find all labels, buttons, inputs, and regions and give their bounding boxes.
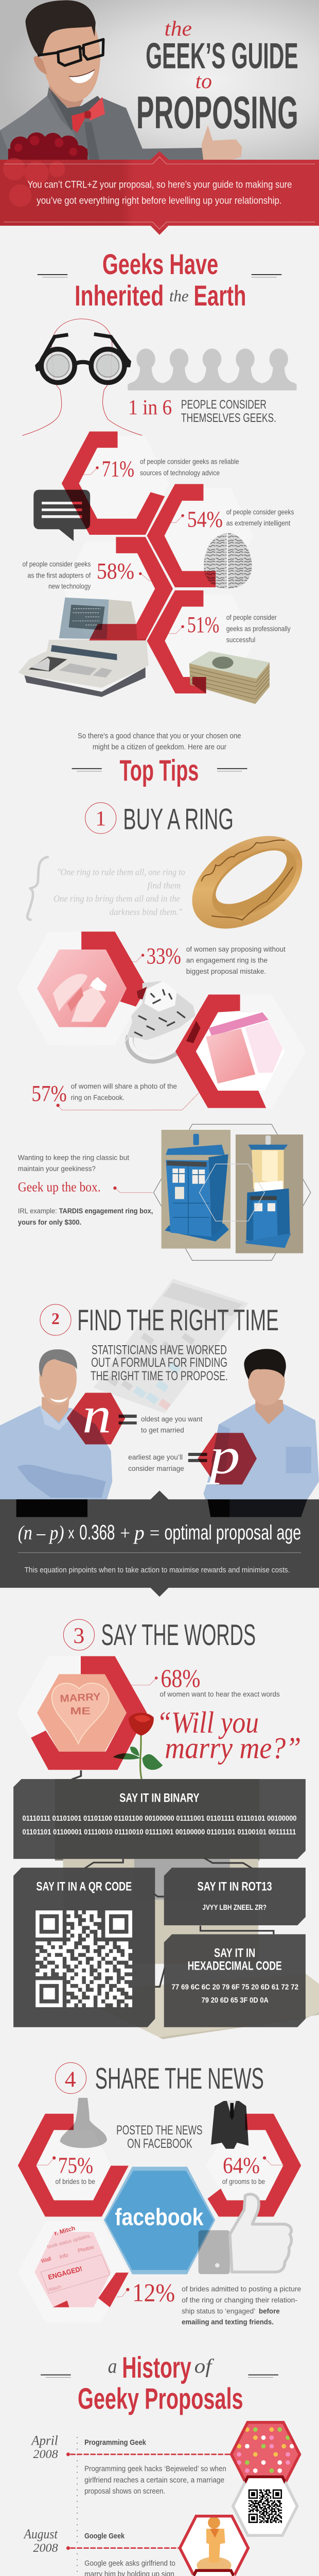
QR code hexagon xyxy=(233,2477,297,2535)
section: tip 4 share the news xyxy=(18,2062,301,2327)
text: geek up the box: TARDIS engagement ring box, xyxy=(59,1207,153,1215)
hexagon: engaged facebook status xyxy=(18,2221,129,2323)
panel: say it in hexadecimal code xyxy=(164,1934,306,2027)
hexagon chain red frames xyxy=(62,431,216,693)
panel: say it in hexadecimal code: SAY IT IN xyxy=(214,1946,255,1960)
icon: speech bubble xyxy=(33,490,90,541)
stat 58%: of people consider geeks xyxy=(22,561,91,569)
heading: a History of Geeky Proposals: Geeky Proposals xyxy=(78,2382,243,2415)
text: statisticians: THE RIGHT TIME TO PROPOSE. xyxy=(91,1369,228,1383)
section: 1 in 6 geeks and reputation stats xyxy=(19,319,297,704)
quote: will you marry me: “Will you xyxy=(156,1705,259,1739)
intro text: might be a citizen of geekdom. Here are our xyxy=(93,743,226,752)
hexagon: brides frame xyxy=(18,2114,129,2216)
dark formula band: x xyxy=(68,1523,74,1542)
hero backdrop xyxy=(0,0,319,161)
head outline xyxy=(22,319,143,435)
panel: say it in binary: SAY IT IN BINARY xyxy=(119,1791,200,1805)
dark formula band: 0.368 xyxy=(79,1520,115,1544)
equals sign and p definition: earliest age you’ll xyxy=(128,1453,183,1462)
icon: thumbs up xyxy=(199,2194,291,2274)
icon: red rose xyxy=(113,1713,163,1779)
stat 33%: 33% xyxy=(147,943,181,969)
stat: 1 in 6 people: PEOPLE CONSIDER xyxy=(181,398,267,412)
stat 71%: 71% xyxy=(102,456,134,481)
timeline: April 2008 programming geek: April xyxy=(30,2432,58,2448)
tip 1 heading: Buy a ring: BUY A RING xyxy=(123,803,234,836)
stat 33% xyxy=(120,943,286,976)
stat 12%: of the ring or changing their relation- xyxy=(182,2296,297,2304)
quote: will you marry me: marry me?” xyxy=(165,1731,301,1765)
timeline dotted spine xyxy=(77,2437,78,2576)
hexagon: 33% of women xyxy=(16,931,147,1045)
hexagon: engaged facebook status: r. Mitch xyxy=(54,2224,76,2237)
timeline: August 2008 google geek: August xyxy=(23,2526,58,2541)
hexagon: engaged facebook status: Info xyxy=(59,2252,69,2260)
equals sign and n definition xyxy=(119,1415,202,1435)
panel: say it in hexadecimal code: HEXADECIMAL CODE xyxy=(188,1960,282,1973)
panel: say it in a QR code xyxy=(13,1868,155,2027)
equals sign and p definition xyxy=(128,1453,207,1473)
panel: say it in a QR code: SAY IT IN A QR CODE xyxy=(36,1880,132,1893)
stat 68% xyxy=(130,1664,280,1699)
stat 68%: 68% xyxy=(161,1664,200,1692)
icon: brain xyxy=(204,533,252,588)
stat 51% xyxy=(164,612,291,645)
stat 64% xyxy=(222,2153,283,2185)
icon: vintage computer xyxy=(19,598,149,697)
stat 75% xyxy=(36,2153,95,2185)
stat 51%: of people consider xyxy=(226,614,277,622)
stat 12%: before xyxy=(259,2307,280,2315)
dark formula band: (n – p) xyxy=(18,1521,64,1544)
stat 51%: successful xyxy=(226,636,255,645)
connectors between panels xyxy=(84,1858,274,1987)
red intro banner: you’ve got everything right before levelling up your relationship. xyxy=(37,195,282,206)
text: posted the news on facebook xyxy=(116,2124,202,2151)
intro text xyxy=(78,732,241,752)
quote: one ring: find them xyxy=(148,880,181,890)
heading: Geeks Have Inherited the Earth: the xyxy=(169,287,189,305)
section: tip 2 find the right time xyxy=(0,1279,319,1597)
heading: a History of Geeky Proposals: History xyxy=(122,2351,191,2384)
heading: Geeks Have Inherited the Earth xyxy=(38,248,281,312)
dark formula band: + xyxy=(120,1523,130,1544)
faded computer behind panels xyxy=(55,1779,319,2039)
stat 54%: as extremely intelligent xyxy=(226,519,290,528)
section: tip 3 say the words xyxy=(13,1619,319,2039)
hexagon: engaged facebook status: Photos xyxy=(77,2244,95,2254)
stat 71%: of people consider geeks as reliable xyxy=(140,458,239,466)
stat 64%: 64% xyxy=(223,2153,260,2178)
hexagon: grooms frame xyxy=(206,2114,301,2216)
connector xyxy=(72,1770,81,1780)
hexagon: engaged facebook status: book status updates, xyxy=(47,2233,92,2250)
stat 33%: of women say proposing without xyxy=(186,945,286,954)
image: bejeweled game xyxy=(231,2422,300,2487)
icon: diamond ring xyxy=(124,981,196,1060)
stat 54%: 54% xyxy=(187,507,223,532)
timeline: April 2008 programming geek: Programming Geek xyxy=(84,2438,146,2447)
title: the Geek's Guide to Proposing xyxy=(136,16,298,138)
hexagon: engaged facebook status: Attach: xyxy=(48,2284,63,2292)
timeline: April 2008 programming geek: Programming geek hacks ‘Bejeweled’ so when xyxy=(84,2465,226,2473)
icon: facebook hexagon with logo xyxy=(104,2167,215,2274)
stat 71% xyxy=(79,456,239,481)
TARDIS ring box photos xyxy=(154,1124,311,1260)
dark formula band: This equation pinpoints when to take action to maximise rewards and minimise costs. xyxy=(24,1566,290,1574)
photo: older man with crossed arms xyxy=(0,1349,112,1517)
dark formula band: p xyxy=(133,1521,145,1544)
text: posted the news on facebook: POSTED THE NEWS xyxy=(116,2124,202,2138)
heading: Geeks Have Inherited the Earth: Geeks Have xyxy=(102,248,218,280)
text: geek up the box: Wanting to keep the ring classic but xyxy=(18,1154,129,1162)
stat 57% xyxy=(31,1081,199,1110)
equals sign and n definition: oldest age you want xyxy=(141,1415,202,1423)
equals sign and n definition: to get married xyxy=(141,1427,184,1435)
silhouettes row xyxy=(128,349,297,391)
hexagon p: p xyxy=(206,1427,240,1485)
heading: a History of Geeky Proposals: of xyxy=(194,2355,215,2378)
title: the Geek's Guide to Proposing: to xyxy=(196,69,212,93)
icon: coke-bottle glasses xyxy=(35,334,131,383)
tip 2 heading: Find the right time: 2 xyxy=(51,1310,60,1328)
hexagon chain backgrounds xyxy=(63,435,254,688)
heading: Geeks Have Inherited the Earth: Inherited xyxy=(75,280,164,312)
quote: will you marry me xyxy=(156,1705,301,1765)
timeline: April 2008 programming geek: 2008 xyxy=(33,2448,58,2461)
panel: say it in binary xyxy=(13,1779,306,1859)
red intro banner xyxy=(0,151,319,235)
text: geek up the box xyxy=(18,1154,153,1227)
quote: one ring: "One ring to rule them all, one ring to xyxy=(57,868,185,877)
text: geek up the box: IRL example: xyxy=(18,1207,57,1215)
panel: say it in ROT13: SAY IT IN ROT13 xyxy=(198,1880,272,1893)
timeline: April 2008 programming geek: proposal shows on screen. xyxy=(84,2487,165,2496)
icon: facebook hexagon with logo: facebook xyxy=(115,2204,203,2230)
text: geek up the box: yours for only $300. xyxy=(18,1218,81,1227)
timeline: August 2008 google geek xyxy=(23,2516,249,2576)
panel: say it in hexadecimal code: 79 20 6D 65 3F 0D 0A xyxy=(201,1996,269,2005)
photo: smiling geek with bow tie and roses xyxy=(0,0,242,162)
stat 12%: of brides admitted to posting a picture xyxy=(182,2285,301,2294)
stat 68%: of women want to hear the exact words xyxy=(160,1690,280,1699)
stat 58%: 58% xyxy=(97,558,134,584)
tip 1 heading: Buy a ring: 1 xyxy=(95,806,106,830)
faded calculator xyxy=(94,1279,248,1413)
timeline: August 2008 google geek: 2008 xyxy=(33,2541,58,2554)
QR code hexagon xyxy=(182,2570,246,2576)
icon: gold ring xyxy=(175,817,319,948)
tip 3 heading: Say the words: 3 xyxy=(74,1623,84,1648)
stat 54% xyxy=(164,507,294,532)
stat 58%: as the first adopters of xyxy=(27,571,91,580)
text: geek up the box: Geek up the box. xyxy=(18,1179,101,1195)
stat 12%: ship status to ‘engaged’ xyxy=(182,2307,255,2315)
heading: a History of Geeky Proposals: a xyxy=(108,2355,117,2378)
intro text: So there's a good chance that you or your chosen one xyxy=(78,732,241,740)
timeline: April 2008 programming geek: girlfriend reaches a certain score, a marriage xyxy=(84,2476,224,2484)
stat: 1 in 6 people xyxy=(128,395,276,425)
hexagon p xyxy=(198,1427,257,1485)
icon: black suit xyxy=(211,2101,249,2149)
stat 75%: 75% xyxy=(58,2153,93,2178)
text: statisticians: STATISTICIANS HAVE WORKED xyxy=(92,1343,227,1357)
title: the Geek's Guide to Proposing: the xyxy=(164,16,192,40)
stat 58%: new technology xyxy=(48,583,91,591)
stat 51%: geeks as professionally xyxy=(226,625,291,633)
hexagon: marry me in sand: ME xyxy=(70,1705,91,1717)
timeline: August 2008 google geek: Google geek asks girlfriend to xyxy=(84,2560,175,2568)
section: top tips intro and buy a ring xyxy=(16,732,319,1260)
equals sign and p definition: consider marriage xyxy=(128,1465,184,1473)
stat 64%: of grooms to be xyxy=(222,2178,265,2185)
hexagon: marry me in sand: MARRY xyxy=(60,1691,101,1705)
stat 54%: of people consider geeks xyxy=(226,508,294,516)
tip 4 heading: Share the news xyxy=(56,2062,264,2095)
stat 57%: 57% xyxy=(31,1081,67,1106)
hero header xyxy=(0,0,319,312)
hexagon: 57% facebook photo xyxy=(175,994,306,1108)
quote: one ring: One ring to bring them all and in the xyxy=(54,894,180,904)
stat 12%: 12% xyxy=(132,2279,175,2307)
hexagon: marry me in sand xyxy=(16,1656,147,1770)
timeline: April 2008 programming geek xyxy=(30,2422,300,2535)
tip 4 heading: Share the news: 4 xyxy=(65,2067,76,2092)
stat: 1 in 6 people: 1 in 6 xyxy=(128,395,172,419)
text: posted the news on facebook: ON FACEBOOK xyxy=(127,2137,192,2151)
dark formula band: = xyxy=(150,1523,160,1544)
hexagon: engaged facebook status: ENGAGED! xyxy=(47,2265,83,2281)
quote: one ring: darkness bind them." xyxy=(110,907,183,917)
text: geek up the box: maintain your geekiness? xyxy=(18,1165,96,1173)
stat 58% xyxy=(22,558,160,591)
icon: stack of money xyxy=(189,651,270,704)
tip 3 heading: Say the words xyxy=(63,1619,256,1652)
stat 51%: 51% xyxy=(187,612,219,637)
hexagon n: n xyxy=(82,1386,111,1444)
stat 57%: of women will share a photo of the xyxy=(71,1082,177,1091)
stat 33%: biggest proposal mistake. xyxy=(186,968,266,976)
text: statisticians: OUT A FORMULA FOR FINDING xyxy=(91,1356,227,1370)
stat 75%: of brides to be xyxy=(56,2178,95,2185)
stat 12%: emailing and texting friends. xyxy=(182,2318,274,2327)
image: street view pegman xyxy=(180,2516,249,2576)
heading: Top Tips: Top Tips xyxy=(120,754,199,787)
panel: say it in ROT13: JVYY LBH ZNEEL ZR? xyxy=(202,1903,267,1912)
stat: 1 in 6 people: THEMSELVES GEEKS. xyxy=(181,412,276,425)
heading: a History of Geeky Proposals xyxy=(41,2351,278,2415)
hexagon: engaged facebook status: Wall xyxy=(41,2256,52,2264)
stat 57%: ring on Facebook. xyxy=(71,1094,125,1102)
text: statisticians xyxy=(91,1343,228,1383)
hexagon n xyxy=(67,1386,125,1444)
panel: say it in ROT13 xyxy=(164,1868,306,1925)
icon: wedding dress xyxy=(60,2098,107,2148)
panel: say it in hexadecimal code: 77 69 6C 6C 20 79 6F 75 20 6D 61 72 72 xyxy=(171,1983,298,1992)
timeline: August 2008 google geek: Google Geek xyxy=(84,2532,125,2540)
tip 1 heading: Buy a ring xyxy=(85,803,234,836)
heading: Geeks Have Inherited the Earth: Earth xyxy=(193,280,246,312)
quote: one ring xyxy=(27,857,185,920)
photo: young man in blue shirt xyxy=(203,1349,319,1517)
dark formula band xyxy=(0,1490,319,1597)
stat 12% xyxy=(117,2279,301,2327)
stat 33%: an engagement ring is the xyxy=(186,957,268,965)
stat 71%: sources of technology advice xyxy=(140,469,220,477)
